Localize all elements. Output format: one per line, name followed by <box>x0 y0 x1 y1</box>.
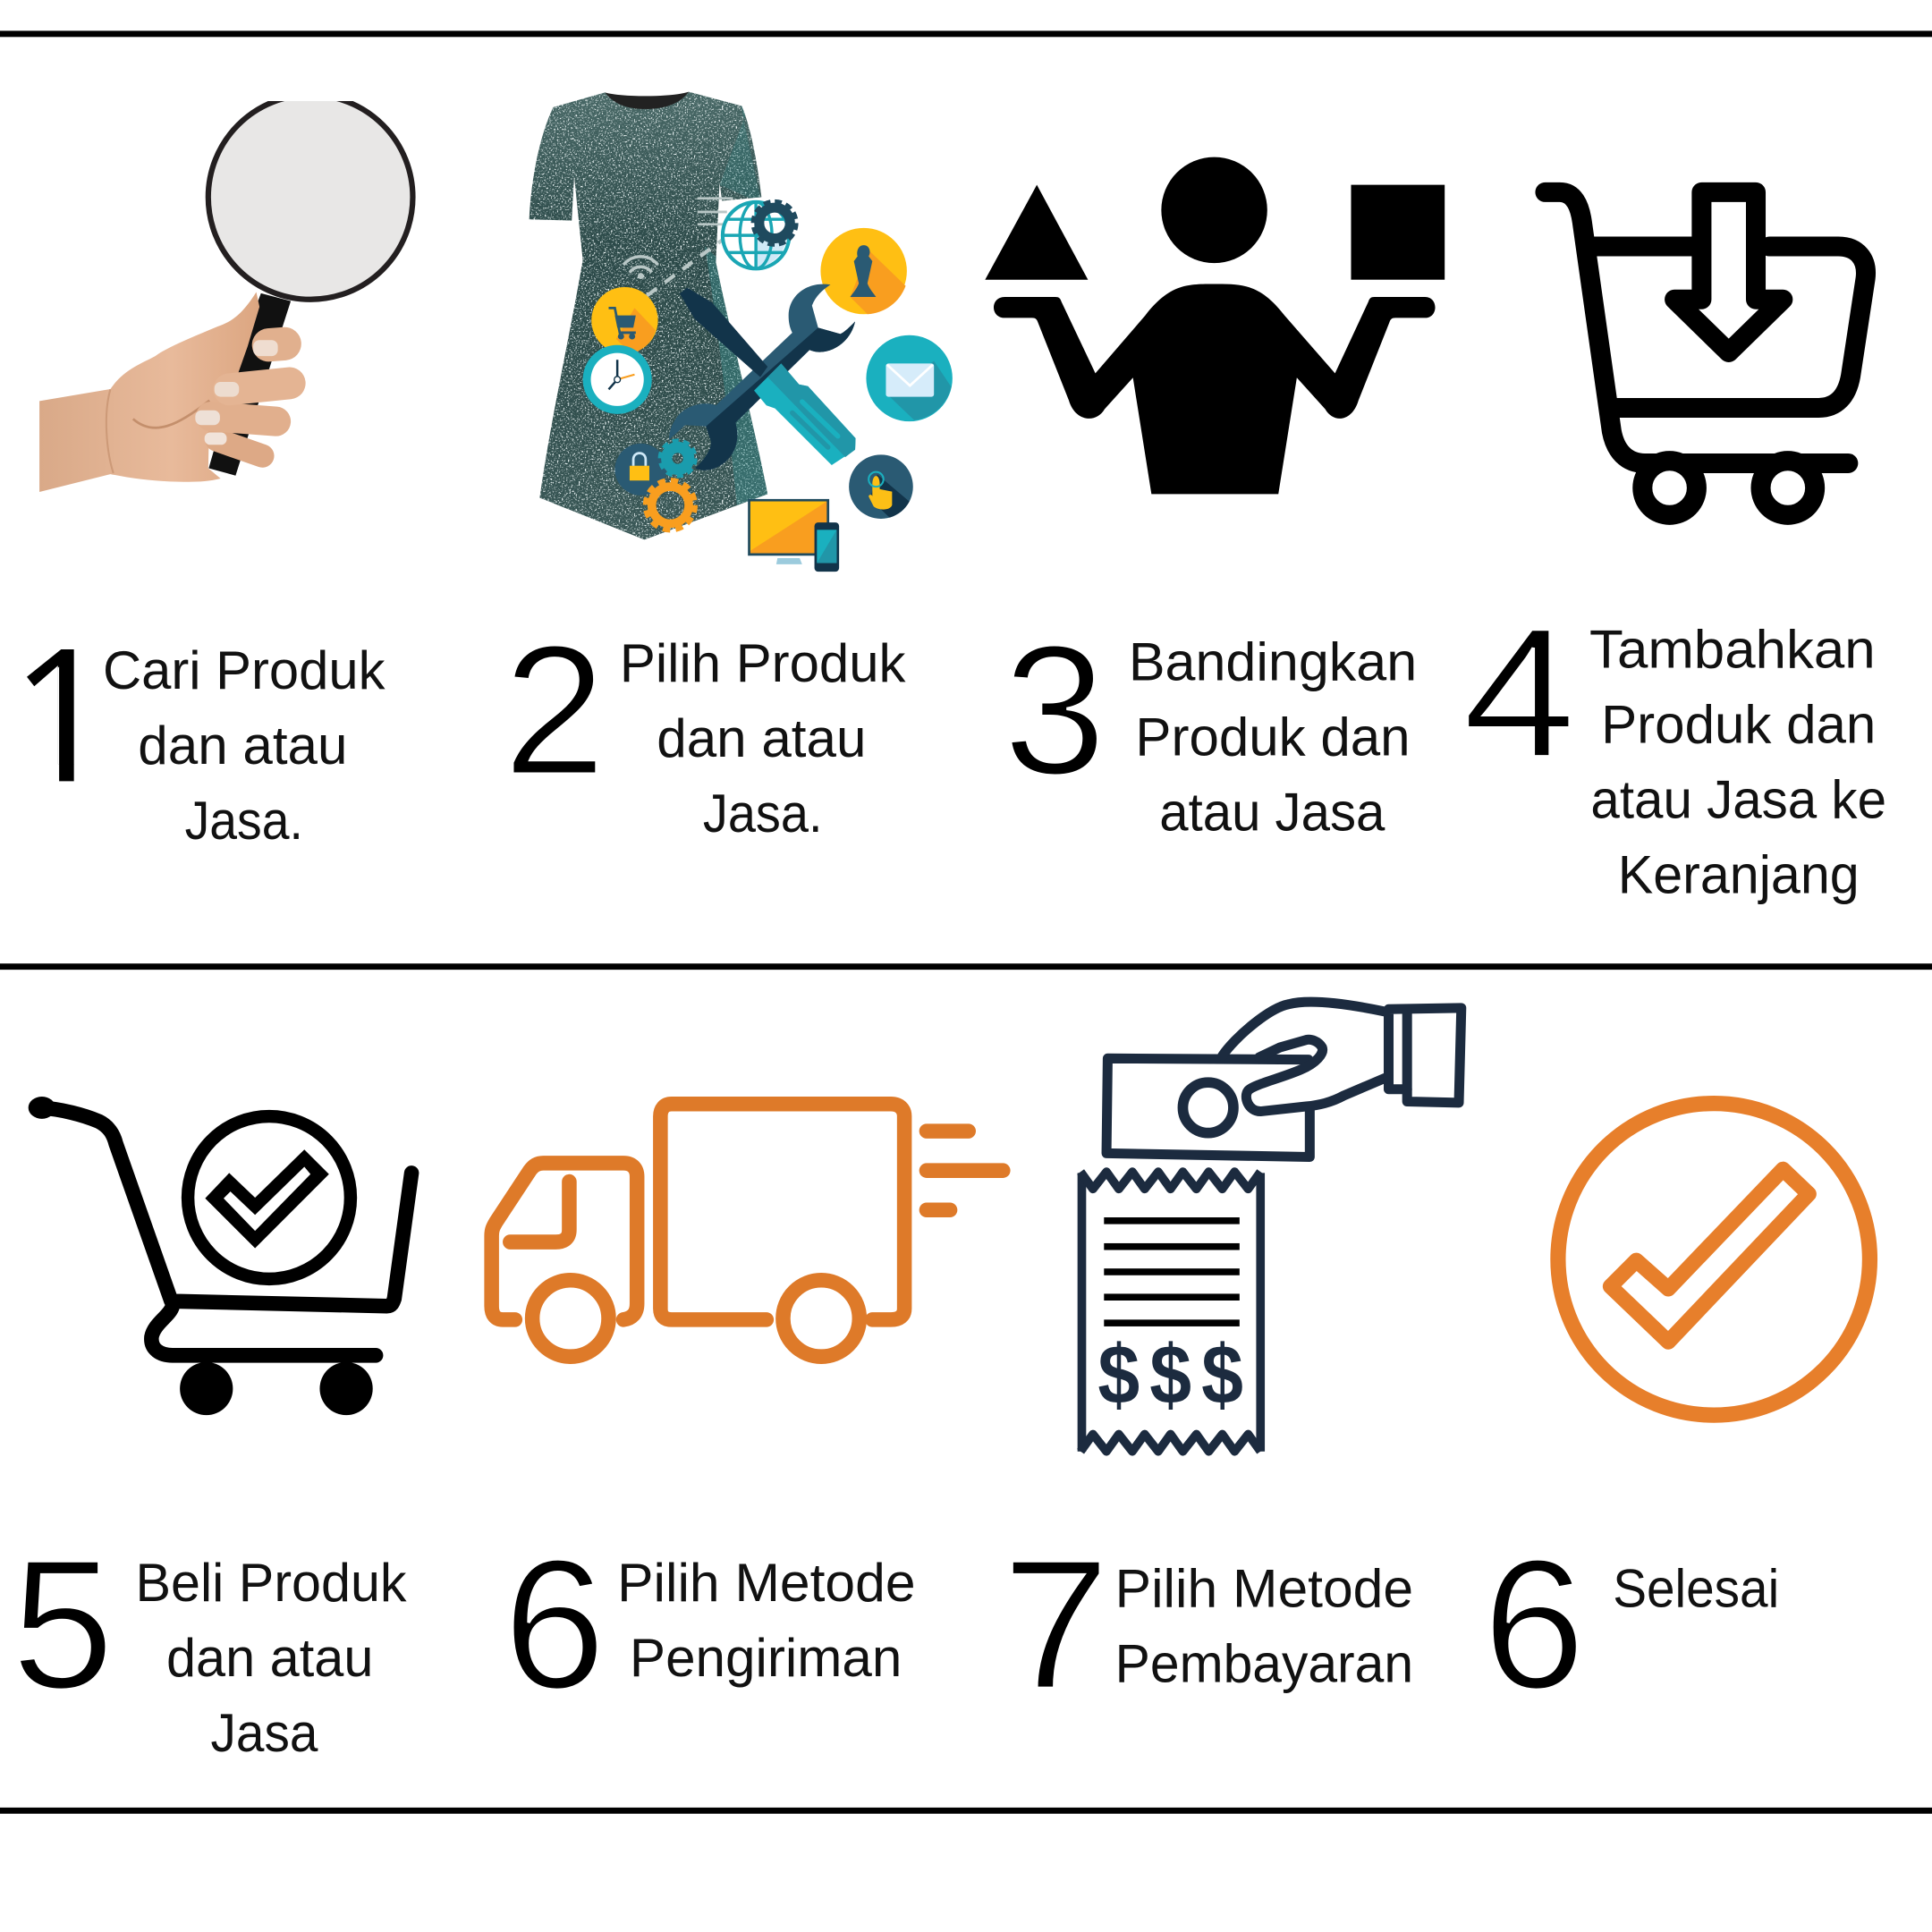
text: Pilih Produk dan atau Jasa: dan atau <box>657 708 866 768</box>
cart circle <box>591 287 658 353</box>
wifi and dashed link <box>623 257 658 272</box>
text: Pilih Metode Pembayaran <box>1115 1557 1413 1693</box>
number 2: 2 <box>503 606 606 813</box>
wrench shaded half <box>695 322 855 470</box>
icon: person weighing triangle and square <box>985 157 1445 494</box>
number 3: 3 <box>1004 606 1106 813</box>
step 4 <box>1462 589 1886 905</box>
text: Cari Produk dan atau Jasa: Cari Produk <box>103 640 386 700</box>
text: Beli Produk dan atau Jasa: dan atau <box>166 1627 373 1688</box>
text: Selesai: Selesai <box>1613 1557 1779 1618</box>
text: Pilih Produk dan atau Jasa <box>620 632 906 843</box>
number 4: 4 <box>1462 589 1576 796</box>
icon: cart with download arrow <box>1545 192 1866 515</box>
lock circle <box>614 444 666 496</box>
step 6 shipping <box>503 1521 916 1727</box>
teal gear <box>660 441 695 476</box>
text: Tambahkan Produk dan atau Jasa ke Keranjang: Tambahkan <box>1589 619 1876 680</box>
text: Beli Produk dan atau Jasa <box>136 1552 407 1763</box>
text: Bandingkan Produk dan atau Jasa <box>1129 631 1417 842</box>
text: Tambahkan Produk dan atau Jasa ke Keranjang <box>1589 619 1886 905</box>
text: Pilih Produk dan atau Jasa: Pilih Produk <box>620 632 906 693</box>
number 1 <box>27 649 74 782</box>
cash and hand <box>1106 1002 1462 1157</box>
text: Pilih Metode Pengiriman <box>617 1552 916 1688</box>
step 5 <box>12 1521 407 1763</box>
step 2 <box>503 606 906 843</box>
text: Bandingkan Produk dan atau Jasa: atau Jasa <box>1159 781 1385 842</box>
text: Pilih Metode Pengiriman: Pengiriman <box>630 1627 902 1688</box>
globe with gear <box>723 202 795 268</box>
receipt: $ <box>1149 1327 1191 1421</box>
receipt: $ <box>1201 1327 1243 1421</box>
text: Pilih Metode Pembayaran: Pilih Metode <box>1115 1557 1413 1618</box>
text: Pilih Metode Pengiriman: Pilih Metode <box>617 1552 916 1613</box>
icon: hand holding magnifying glass <box>39 95 412 492</box>
number 6: 6 <box>1483 1521 1586 1727</box>
dress <box>523 86 776 545</box>
text: Tambahkan Produk dan atau Jasa ke Keranjang: Produk dan <box>1601 694 1876 755</box>
text: Bandingkan Produk dan atau Jasa: Bandingkan <box>1129 631 1417 691</box>
receipt <box>1080 1172 1260 1452</box>
number 5: 5 <box>12 1521 114 1727</box>
number 7: 7 <box>1002 1521 1110 1727</box>
wrench <box>669 284 855 470</box>
icon: hand paying cash above receipt <box>1080 1002 1462 1452</box>
text: Tambahkan Produk dan atau Jasa ke Keranjang: Keranjang <box>1618 844 1860 905</box>
icon: cart with check circle <box>29 1097 411 1415</box>
clock <box>583 345 652 414</box>
icon: delivery truck <box>492 1104 1003 1357</box>
step 1 <box>27 649 385 839</box>
step 6 finish <box>1483 1521 1779 1727</box>
mail circle <box>866 335 953 421</box>
text: Cari Produk dan atau Jasa: Jasa. <box>185 790 303 851</box>
bottom divider <box>0 1808 1932 1814</box>
icon: orange check circle <box>1558 1104 1869 1415</box>
receipt: $ <box>1097 1327 1140 1421</box>
number 1: 1 <box>12 614 114 820</box>
monitor and phone <box>748 499 839 572</box>
orange gear <box>646 480 695 530</box>
icon: dress with digital service icons <box>523 86 953 572</box>
step 7 <box>1002 1521 1413 1727</box>
text: Bandingkan Produk dan atau Jasa: Produk dan <box>1135 706 1411 767</box>
top divider <box>0 30 1932 37</box>
step 3 <box>1004 606 1417 842</box>
text: Tambahkan Produk dan atau Jasa ke Keranjang: atau Jasa ke <box>1590 769 1886 830</box>
number 6: 6 <box>503 1521 606 1727</box>
text: Beli Produk dan atau Jasa: Beli Produk <box>136 1552 407 1613</box>
text: Cari Produk dan atau Jasa <box>103 640 386 851</box>
middle divider <box>0 963 1932 970</box>
screwdriver <box>680 288 856 465</box>
text: Pilih Produk dan atau Jasa: Jasa. <box>703 783 823 843</box>
hand tap circle <box>849 454 913 519</box>
text: Cari Produk dan atau Jasa: dan atau <box>138 715 347 775</box>
text: Beli Produk dan atau Jasa: Jasa <box>211 1702 318 1763</box>
text: Pilih Metode Pembayaran: Pembayaran <box>1115 1632 1413 1693</box>
chess circle <box>820 228 907 314</box>
